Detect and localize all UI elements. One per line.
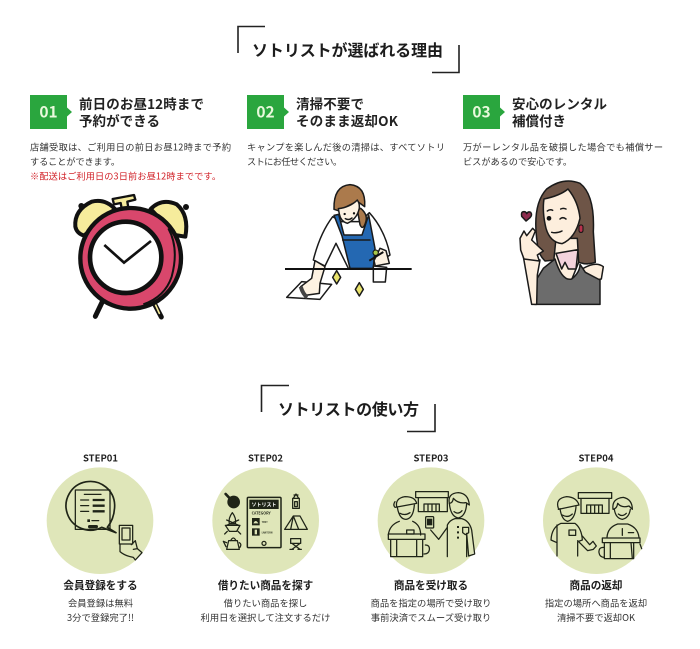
badge 02 — [247, 95, 289, 129]
reason 01 description: 店舗受取は、ご利用日の前日お昼12時まで予約 — [30, 140, 231, 154]
heading: why Sotolist is chosen: ソトリストが選ばれる理由 — [252, 37, 443, 61]
step 01 description: 3分で登録完了!! — [67, 610, 134, 624]
step 02 description: 借りたい商品を探し — [224, 596, 307, 610]
reason 03 description: ビスがあるので安心です。 — [463, 154, 572, 168]
reason 01 title: 予約ができる — [79, 110, 160, 130]
reason 03 title: 安心のレンタル — [512, 93, 608, 113]
step 03 title: 商品を受け取る — [394, 578, 468, 593]
step 02 — [201, 450, 330, 624]
panel: reason 03 — [463, 93, 663, 304]
badge 01 — [30, 95, 72, 129]
badge 03 — [463, 95, 505, 129]
icon: tablet with camping gear — [212, 467, 319, 574]
reason 03 description: 万がーレンタル品を破損した場合でも補償サー — [463, 140, 663, 154]
step 01 label: STEP01 — [83, 450, 118, 464]
step 02 title: 借りたい商品を探す — [218, 578, 313, 593]
reason 02 title: 清掃不要で — [296, 93, 364, 113]
badge 01: 01 — [39, 100, 58, 122]
icon: tablet with camping gear: LANTERN — [262, 530, 273, 534]
heading: why Sotolist is chosen — [238, 26, 459, 72]
step 03 description: 商品を指定の場所で受け取り — [371, 596, 491, 610]
icon: customer receiving goods at store counter — [378, 467, 484, 574]
reason 01 description: することができます。 — [30, 154, 120, 168]
badge 02: 02 — [256, 100, 275, 122]
step 01 description: 会員登録は無料 — [68, 596, 133, 610]
panel: reason 02 — [247, 93, 445, 299]
step 02 label: STEP02 — [248, 450, 283, 464]
step 04 description: 清掃不要で返却OK — [557, 610, 635, 624]
reason 02 description: キャンプを楽しんだ後の清掃は、すべてソトリ — [247, 140, 445, 154]
step 01 — [47, 450, 153, 624]
step 04 label: STEP04 — [578, 450, 614, 464]
step 04 — [543, 450, 650, 624]
heading: how to use Sotolist: ソトリストの使い方 — [278, 396, 419, 420]
icon: tablet with camping gear: CATEGORY — [252, 511, 272, 516]
step 04 title: 商品の返却 — [570, 578, 622, 593]
icon: registration form on smartphone — [47, 467, 153, 574]
step 03 — [371, 450, 491, 624]
icon: customer returning goods at store counter — [543, 467, 650, 574]
reason 02 description: ストにお任せください。 — [247, 154, 342, 168]
step 03 label: STEP03 — [413, 450, 449, 464]
reason 01 title: 前日のお昼12時まで — [79, 93, 204, 113]
illustration: woman making a finger heart — [520, 181, 603, 304]
step 02 description: 利用日を選択して注文するだけ — [201, 610, 330, 624]
icon: alarm clock — [75, 195, 189, 317]
heading: how to use Sotolist — [262, 386, 435, 432]
reason 02 title: そのまま返却OK — [296, 110, 399, 130]
step 04 description: 指定の場所へ商品を返却 — [545, 596, 647, 610]
badge 03: 03 — [472, 100, 491, 122]
step 01 title: 会員登録をする — [63, 578, 138, 593]
illustration: woman cleaning a table — [285, 185, 412, 299]
icon: tablet with camping gear: TENT — [262, 520, 268, 524]
reason 01 description: ※配送はご利用日の3日前お昼12時までです。 — [30, 168, 221, 182]
step 03 description: 事前決済でスムーズ受け取り — [371, 610, 491, 624]
icon: tablet with camping gear: ソトリスト — [252, 502, 276, 509]
panel: reason 01 — [30, 93, 231, 317]
reason 03 title: 補償付き — [512, 110, 566, 130]
